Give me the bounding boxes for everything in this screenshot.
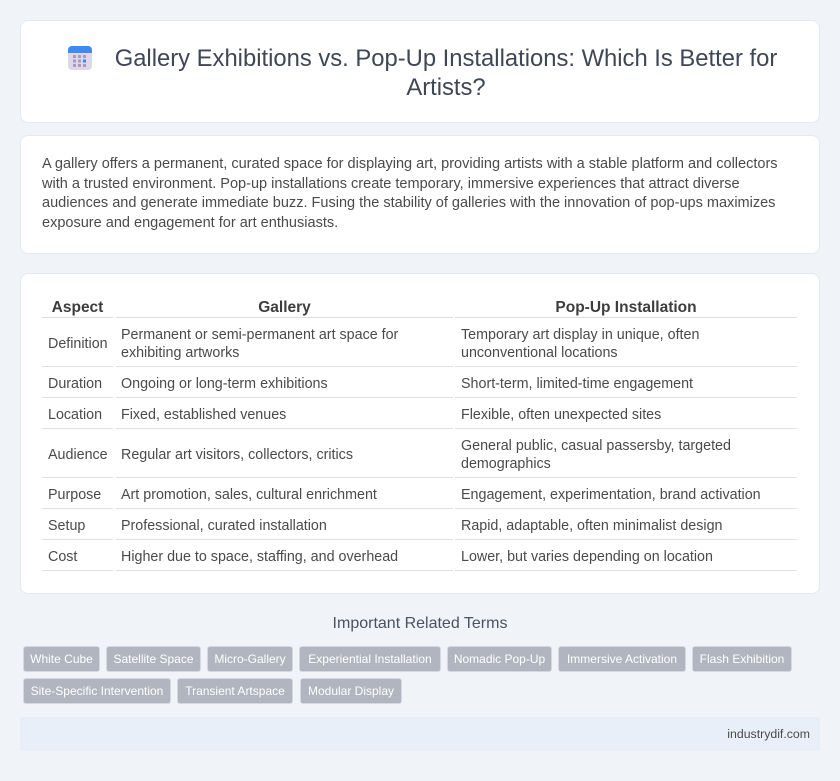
comparison table: Lower, but varies depending on location — [461, 549, 713, 565]
related terms tags: Flash Exhibition — [700, 652, 784, 666]
title panel — [20, 20, 820, 123]
intro text: audiences and generate immediate buzz. Fusing the stability of galleries with the innovation of pop-ups maximizes — [42, 195, 775, 211]
comparison table: exhibiting artworks — [121, 345, 239, 361]
related terms tags: Modular Display — [308, 684, 394, 698]
comparison table: Professional, curated installation — [121, 518, 327, 534]
comparison table: Temporary art display in unique, often — [461, 327, 699, 343]
panel: comparison table — [20, 273, 820, 594]
comparison table: Regular art visitors, collectors, critics — [121, 447, 353, 463]
title: Artists? — [406, 74, 486, 101]
comparison table: Rapid, adaptable, often minimalist design — [461, 518, 722, 534]
comparison table: General public, casual passersby, targeted — [461, 438, 731, 454]
related terms tags: Immersive Activation — [567, 652, 677, 666]
related terms tags — [23, 646, 792, 704]
comparison table: Cost — [48, 549, 77, 565]
comparison table: Short-term, limited-time engagement — [461, 376, 693, 392]
title: Gallery Exhibitions vs. Pop-Up Installations: Which Is Better for — [115, 45, 777, 72]
comparison table: Duration — [48, 376, 102, 392]
related terms tags: Transient Artspace — [185, 684, 285, 698]
related terms tags: Nomadic Pop-Up — [454, 652, 545, 666]
related terms tags: Satellite Space — [113, 652, 194, 666]
intro text: A gallery offers a permanent, curated space for displaying art, providing artists with a stable platform and collectors — [42, 156, 778, 172]
comparison table: Pop-Up Installation — [555, 299, 697, 316]
footer source: industrydif.com — [727, 727, 810, 741]
intro text: with a trusted environment. Pop-up installations create temporary, immersive experiences that attract diverse — [42, 176, 740, 192]
related terms tags: Experiential Installation — [308, 652, 432, 666]
footer bar — [20, 717, 820, 751]
icon: calendar — [68, 46, 92, 70]
comparison table: demographics — [461, 456, 551, 472]
comparison table: Higher due to space, staffing, and overhead — [121, 549, 398, 565]
related terms tags: Site-Specific Intervention — [31, 684, 163, 698]
panel: intro — [20, 135, 820, 254]
comparison table: Aspect — [52, 299, 103, 316]
comparison table: Definition — [48, 336, 108, 352]
comparison table: Permanent or semi-permanent art space for — [121, 327, 398, 343]
comparison table: Purpose — [48, 487, 101, 503]
comparison table: Fixed, established venues — [121, 407, 286, 423]
related terms tags: White Cube — [30, 652, 93, 666]
comparison table — [42, 299, 797, 571]
comparison table: Engagement, experimentation, brand activation — [461, 487, 761, 503]
title — [115, 45, 777, 101]
comparison table: Flexible, often unexpected sites — [461, 407, 661, 423]
comparison table: Art promotion, sales, cultural enrichment — [121, 487, 377, 503]
comparison table: Setup — [48, 518, 85, 534]
comparison table: unconventional locations — [461, 345, 618, 361]
intro text — [42, 156, 778, 230]
related terms heading: Important Related Terms — [333, 615, 507, 632]
comparison table: Location — [48, 407, 102, 423]
comparison table: Gallery — [258, 299, 311, 316]
comparison table: Ongoing or long-term exhibitions — [121, 376, 328, 392]
comparison table: Audience — [48, 447, 108, 463]
intro text: exposure and engagement for art enthusiasts. — [42, 214, 338, 230]
related terms tags: Micro-Gallery — [214, 652, 286, 666]
